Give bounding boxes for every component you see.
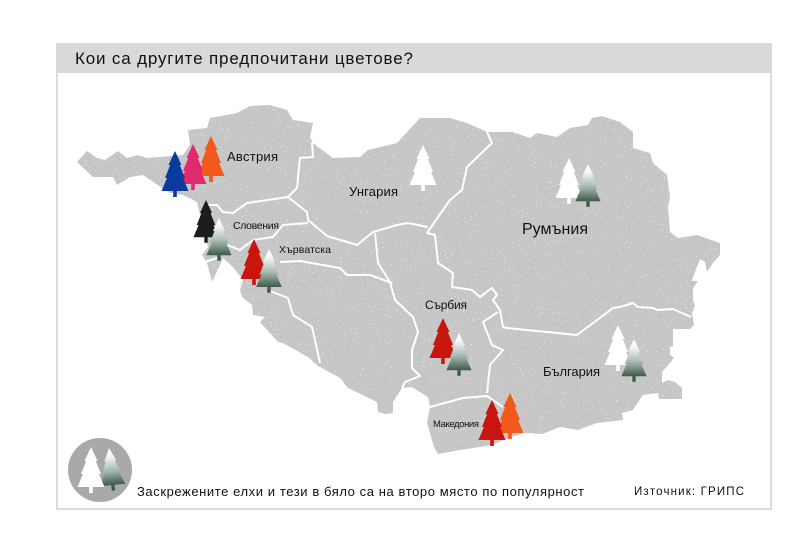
map: Balkan countries bbox=[70, 100, 725, 460]
title: Кои са другите предпочитани цветове? bbox=[75, 49, 413, 68]
tree: Hungary bbox=[410, 145, 436, 191]
trees: Serbia bbox=[430, 318, 472, 376]
label: Македония: Македония bbox=[433, 419, 479, 430]
label: Унгария: Унгария bbox=[349, 184, 398, 199]
label: Хърватска: Хърватска bbox=[279, 244, 331, 256]
panel: infographic frame bbox=[56, 43, 772, 509]
country borders bbox=[205, 132, 691, 407]
source: Източник: ГРИПС bbox=[634, 486, 744, 498]
label: Румъния: Румъния bbox=[522, 221, 588, 238]
trees: Romania bbox=[556, 158, 601, 207]
header bar bbox=[56, 43, 772, 73]
trees: Bulgaria bbox=[604, 325, 647, 382]
label: Словения: Словения bbox=[233, 220, 279, 232]
icon: legend circle with trees bbox=[68, 438, 132, 502]
label: Австрия: Австрия bbox=[227, 149, 278, 164]
legend caption: Заскрежените елхи и тези в бяло са на второ място по популярност bbox=[137, 484, 584, 499]
trees: Croatia bbox=[240, 239, 282, 293]
label: България: България bbox=[543, 364, 600, 379]
label: Сърбия: Сърбия bbox=[425, 298, 467, 312]
trees: Austria bbox=[162, 136, 224, 197]
trees: Macedonia bbox=[478, 393, 524, 446]
trees: Slovenia bbox=[193, 200, 232, 261]
